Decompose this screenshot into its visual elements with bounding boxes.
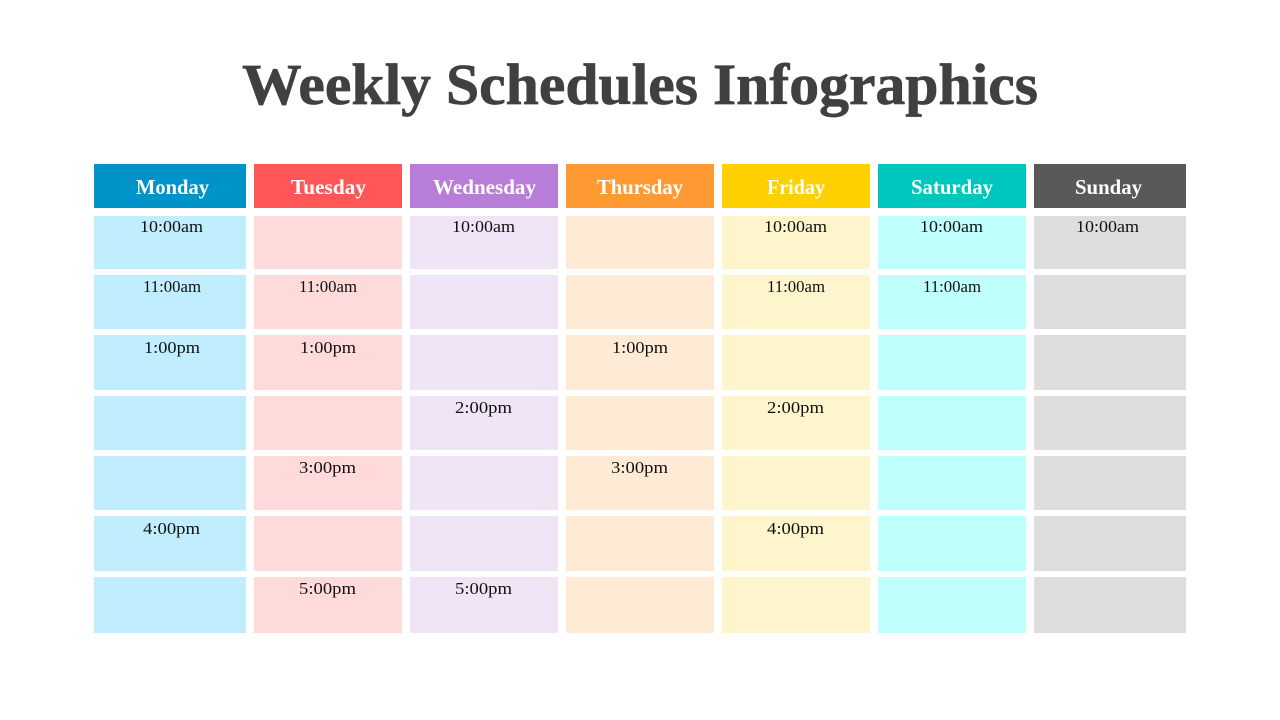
slot: Tuesday 3:00pm: 3:00pm	[299, 458, 356, 477]
slot: Monday empty	[94, 577, 246, 633]
column: Tuesday	[254, 164, 402, 633]
slot: Tuesday 1:00pm	[254, 335, 402, 390]
slot: Wednesday empty	[410, 335, 558, 390]
column: Friday	[722, 164, 870, 633]
slot: Saturday 11:00am: 11:00am	[923, 277, 981, 296]
slot: Saturday empty	[878, 396, 1026, 450]
header: Tuesday	[254, 164, 402, 208]
slot: Saturday empty	[878, 577, 1026, 633]
slot: Wednesday empty	[410, 275, 558, 329]
slot: Wednesday 10:00am	[410, 216, 558, 269]
slot: Wednesday 2:00pm	[410, 396, 558, 450]
slot: Tuesday empty	[254, 516, 402, 571]
slot: Sunday empty	[1034, 516, 1186, 571]
header: Thursday	[566, 164, 714, 208]
slot: Monday 4:00pm: 4:00pm	[143, 519, 200, 538]
slot: Friday empty	[722, 335, 870, 390]
slot: Monday 10:00am	[94, 216, 246, 269]
slot: Monday 11:00am: 11:00am	[143, 277, 201, 296]
slot: Tuesday 1:00pm: 1:00pm	[300, 338, 356, 357]
column: Wednesday	[410, 164, 558, 633]
slot: Sunday empty	[1034, 396, 1186, 450]
slot: Friday 4:00pm	[722, 516, 870, 571]
slot: Monday 10:00am: 10:00am	[140, 217, 203, 236]
slot: Sunday empty	[1034, 577, 1186, 633]
slot: Wednesday 5:00pm: 5:00pm	[455, 579, 512, 598]
column: Saturday	[878, 164, 1026, 633]
header: Friday: Friday	[767, 175, 825, 199]
title: Weekly Schedules Infographics	[242, 52, 1038, 117]
slot: Thursday 3:00pm: 3:00pm	[611, 458, 668, 477]
slot: Monday 11:00am	[94, 275, 246, 329]
slot: Friday 11:00am: 11:00am	[767, 277, 825, 296]
slot: Thursday empty	[566, 577, 714, 633]
slot: Thursday 3:00pm	[566, 456, 714, 510]
slot: Wednesday 10:00am: 10:00am	[452, 217, 515, 236]
slot: Sunday 10:00am	[1034, 216, 1186, 269]
header: Sunday	[1034, 164, 1186, 208]
header: Wednesday: Wednesday	[433, 175, 536, 199]
slot: Friday 11:00am	[722, 275, 870, 329]
slot: Monday empty	[94, 396, 246, 450]
slot: Tuesday 3:00pm	[254, 456, 402, 510]
slot: Tuesday 5:00pm: 5:00pm	[299, 579, 356, 598]
header: Monday	[94, 164, 246, 208]
slot: Monday 1:00pm	[94, 335, 246, 390]
slot: Saturday empty	[878, 456, 1026, 510]
header: Saturday: Saturday	[911, 175, 993, 199]
slot: Friday 2:00pm	[722, 396, 870, 450]
slot: Wednesday 2:00pm: 2:00pm	[455, 398, 512, 417]
slot: Monday 1:00pm: 1:00pm	[144, 338, 200, 357]
header: Wednesday	[410, 164, 558, 208]
slot: Tuesday empty	[254, 216, 402, 269]
slot: Saturday 10:00am: 10:00am	[920, 217, 983, 236]
slot: Wednesday empty	[410, 456, 558, 510]
header: Thursday: Thursday	[597, 175, 683, 199]
slot: Tuesday 11:00am: 11:00am	[299, 277, 357, 296]
slot: Sunday empty	[1034, 335, 1186, 390]
slot: Sunday empty	[1034, 456, 1186, 510]
slot: Sunday 10:00am: 10:00am	[1076, 217, 1139, 236]
slot: Thursday empty	[566, 396, 714, 450]
slot: Tuesday 5:00pm	[254, 577, 402, 633]
header: Friday	[722, 164, 870, 208]
header: Sunday: Sunday	[1075, 175, 1142, 199]
slot: Sunday empty	[1034, 275, 1186, 329]
column: Thursday	[566, 164, 714, 633]
slot: Friday 10:00am: 10:00am	[764, 217, 827, 236]
slot: Saturday empty	[878, 516, 1026, 571]
header: Monday: Monday	[136, 175, 209, 199]
slot: Friday empty	[722, 456, 870, 510]
slot: Saturday empty	[878, 335, 1026, 390]
slot: Thursday empty	[566, 516, 714, 571]
slot: Thursday 1:00pm: 1:00pm	[612, 338, 668, 357]
slot: Thursday empty	[566, 275, 714, 329]
column: Monday	[94, 164, 246, 633]
slot: Thursday empty	[566, 216, 714, 269]
column: Sunday	[1034, 164, 1186, 633]
slot: Friday 4:00pm: 4:00pm	[767, 519, 824, 538]
slot: Wednesday 5:00pm	[410, 577, 558, 633]
slot: Monday 4:00pm	[94, 516, 246, 571]
slot: Friday empty	[722, 577, 870, 633]
slot: Wednesday empty	[410, 516, 558, 571]
slot: Saturday 10:00am	[878, 216, 1026, 269]
slot: Saturday 11:00am	[878, 275, 1026, 329]
slot: Friday 2:00pm: 2:00pm	[767, 398, 824, 417]
slot: Friday 10:00am	[722, 216, 870, 269]
slot: Tuesday 11:00am	[254, 275, 402, 329]
header: Tuesday: Tuesday	[291, 175, 367, 199]
header: Saturday	[878, 164, 1026, 208]
slot: Tuesday empty	[254, 396, 402, 450]
slot: Thursday 1:00pm	[566, 335, 714, 390]
slot: Monday empty	[94, 456, 246, 510]
